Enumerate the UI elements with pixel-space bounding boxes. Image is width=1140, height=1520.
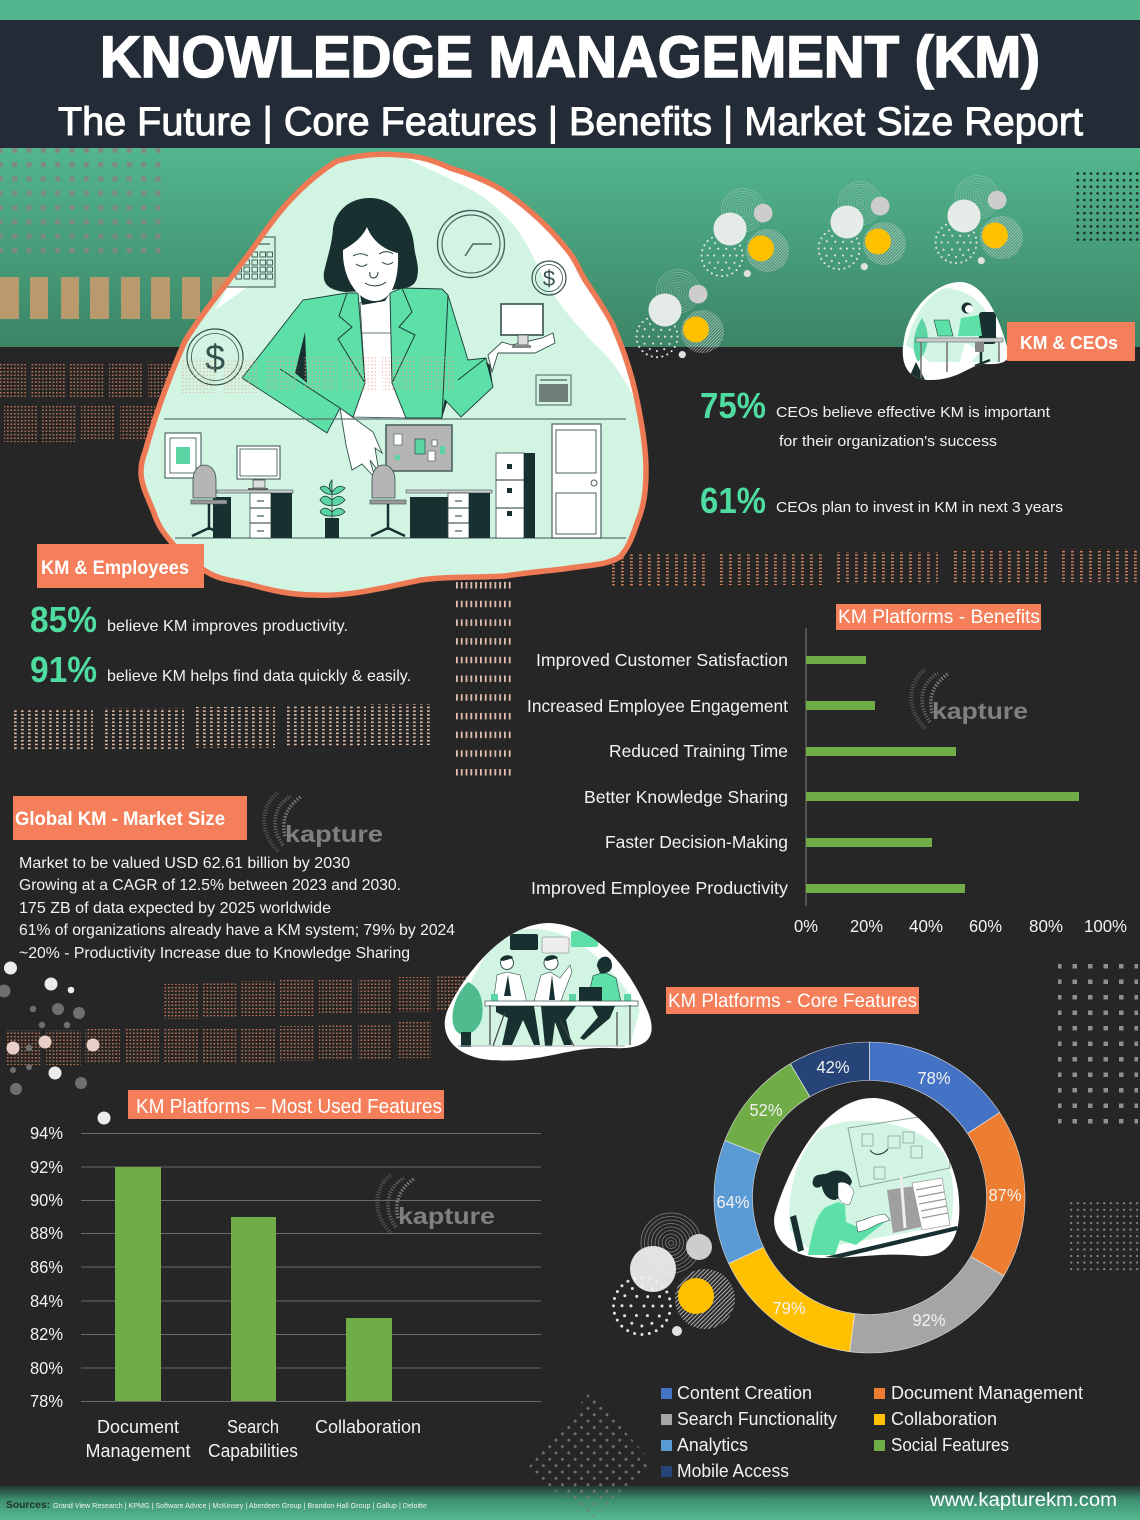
legend: document management: Document Management (891, 1383, 1083, 1403)
sources line: Grand View Research | KPMG | Software Advice | McKinsey | Aberdeen Group | Brandon Hall Group | Gallup | Deloitte (53, 1503, 427, 1510)
CEO illustration blob (903, 282, 1009, 380)
dollar coin large (187, 329, 243, 385)
legend: content creation: Content Creation (677, 1383, 812, 1403)
y axis labels: 84% (30, 1291, 63, 1311)
market size text block: 61% of organizations already have a KM system; 79% by 2024 (19, 922, 455, 939)
footer band (0, 1486, 1140, 1520)
decorative circle cluster bottom (614, 1213, 735, 1336)
kapture logo market (264, 792, 383, 851)
market size text block (19, 855, 455, 962)
title: KNOWLEDGE MANAGEMENT (KM) (100, 25, 1040, 90)
y axis labels: 90% (30, 1190, 63, 1210)
donut value labels: 42% (816, 1057, 850, 1077)
benefit: improved employee productivity (531, 878, 965, 898)
y axis labels: 82% (30, 1324, 63, 1344)
sources line (6, 1500, 427, 1511)
column: collaboration 83%: Collaboration (315, 1417, 421, 1437)
hand holding monitor (488, 304, 555, 372)
donut legend (661, 1383, 1083, 1481)
donut value labels: 78% (918, 1068, 950, 1088)
benefit: reduced training time (609, 741, 956, 761)
top green band (0, 0, 1140, 20)
donut value labels: 92% (912, 1310, 946, 1330)
employee statistic 91% (30, 649, 411, 690)
benefits x axis labels: 80% (1029, 916, 1063, 936)
team meeting illustration blob (445, 923, 652, 1061)
donut value labels: 79% (772, 1298, 806, 1318)
y axis labels: 86% (30, 1257, 63, 1277)
y axis labels (30, 1123, 63, 1411)
benefit: faster decision making (605, 832, 932, 852)
CEO statistic 75% (700, 385, 1051, 450)
CEO statistic 61%: CEOs plan to invest in KM in next 3 years (776, 499, 1063, 516)
donut value labels: 52% (750, 1100, 782, 1120)
core features donut chart (681, 1009, 1058, 1386)
market size text block: 175 ZB of data expected by 2025 worldwide (19, 900, 331, 917)
woman head and hair (324, 198, 418, 305)
calendar right (536, 375, 571, 405)
Global KM Market Size label: Global KM - Market Size (15, 809, 225, 830)
benefit: faster decision making: Faster Decision-Making (605, 832, 788, 852)
Global KM Market Size label (13, 796, 247, 840)
benefits x axis labels: 100% (1084, 916, 1127, 936)
kapture logo market: kapture (285, 821, 383, 847)
header dark banner (0, 20, 1140, 148)
market size text block: Market to be valued USD 62.61 billion by 2030 (19, 855, 350, 872)
column: search capabilities 89%: Capabilities (208, 1441, 298, 1461)
dollar coin small (532, 261, 566, 295)
legend: collaboration: Collaboration (891, 1409, 997, 1429)
main illustration: woman managing office in blob (141, 150, 680, 595)
column: search capabilities 89%: Search (227, 1417, 279, 1437)
KM & Employees label: KM & Employees (41, 558, 189, 579)
benefits x axis labels: 0% (794, 916, 818, 936)
benefit: reduced training time: Reduced Training Time (609, 741, 788, 761)
sources line: Sources: (6, 1500, 50, 1511)
KM & Employees label (37, 544, 204, 588)
donut value labels (716, 1057, 1022, 1330)
decorative circle clusters on green band (637, 176, 1023, 358)
column: document management 92%: Document (97, 1417, 179, 1437)
benefit: increased employee engagement: Increased Employee Engagement (527, 696, 788, 716)
donut value labels: 64% (716, 1192, 750, 1212)
CEO statistic 61%: 61% (700, 480, 766, 521)
y axis labels: 78% (30, 1391, 63, 1411)
KM & CEOs label: KM & CEOs (1020, 333, 1118, 353)
KM & CEOs label (1007, 322, 1135, 361)
donut centre illustration: woman at computer (774, 1098, 959, 1258)
legend: social features: Social Features (891, 1435, 1009, 1455)
benefit: better knowledge sharing: Better Knowledge Sharing (584, 787, 788, 807)
market size text block: Growing at a CAGR of 12.5% between 2023 and 2030. (19, 877, 401, 894)
CEO statistic 61% (700, 480, 1063, 521)
employee statistic 91%: 91% (30, 649, 97, 690)
dollar coin large: $ (205, 337, 225, 378)
most used features title label: KM Platforms – Most Used Features (136, 1096, 442, 1118)
kapture logo benefits (911, 669, 1028, 728)
benefit: improved customer satisfaction: Improved Customer Satisfaction (536, 650, 788, 670)
benefits x axis labels: 20% (850, 916, 883, 936)
benefits title label: KM Platforms - Benefits (838, 607, 1040, 628)
benefits bar chart (527, 628, 1127, 936)
y axis labels: 80% (30, 1358, 63, 1378)
employee statistic 85% (30, 599, 348, 640)
CEO statistic 75%: 75% (700, 385, 766, 426)
website url: www.kapturekm.com (929, 1490, 1117, 1511)
core features title label: KM Platforms - Core Features (668, 991, 917, 1012)
benefits x axis labels: 40% (909, 916, 943, 936)
kapture logo benefits: kapture (932, 698, 1028, 724)
kapture logo chart (377, 1174, 495, 1233)
employee statistic 85%: believe KM improves productivity. (107, 618, 348, 635)
dollar coin small: $ (543, 266, 555, 291)
column: document management 92%: Management (86, 1441, 190, 1461)
column: document management 92% (86, 1167, 190, 1461)
employee statistic 85%: 85% (30, 599, 97, 640)
benefit: improved employee productivity: Improved Employee Productivity (531, 878, 788, 898)
green gradient band (0, 148, 1140, 347)
subtitle: The Future | Core Features | Benefits | Market Size Report (58, 100, 1083, 144)
employee statistic 91%: believe KM helps find data quickly & easily. (107, 668, 411, 685)
y axis labels: 88% (30, 1223, 63, 1243)
y axis labels: 92% (30, 1157, 63, 1177)
market size text block: ~20% - Productivity Increase due to Knowledge Sharing (19, 945, 410, 962)
y axis labels: 94% (30, 1123, 63, 1143)
benefit: better knowledge sharing (584, 787, 1079, 807)
benefits x axis labels (794, 916, 1127, 936)
column: collaboration 83% (315, 1318, 421, 1437)
hand reaching down (340, 408, 382, 478)
wall clock (438, 210, 504, 278)
legend: analytics: Analytics (677, 1435, 748, 1455)
calendar left (227, 236, 276, 288)
legend: search functionality: Search Functionality (677, 1409, 837, 1429)
legend: mobile access: Mobile Access (677, 1461, 789, 1481)
woman jacket and shirt (242, 288, 493, 433)
scattered dots left (0, 962, 110, 1124)
CEO statistic 75%: for their organization's success (779, 433, 997, 450)
CEO statistic 75%: CEOs believe effective KM is important (776, 404, 1051, 421)
donut value labels: 87% (988, 1185, 1022, 1205)
shelf and floor lines (164, 419, 626, 538)
most used features column chart (30, 1123, 541, 1461)
column: search capabilities 89% (208, 1217, 298, 1461)
office shelf scene (165, 424, 601, 538)
benefits x axis labels: 60% (969, 916, 1002, 936)
kapture logo chart: kapture (398, 1203, 495, 1229)
